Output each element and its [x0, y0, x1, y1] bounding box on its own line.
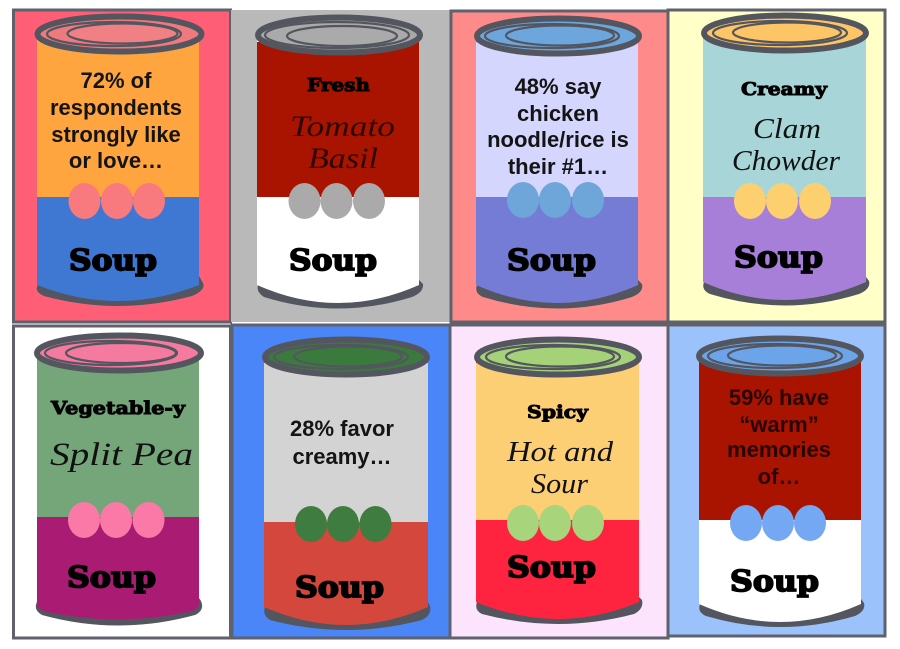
lid — [477, 18, 639, 54]
lid — [699, 338, 861, 374]
can text: noodle/rice is — [487, 127, 629, 152]
panel: Fresh Tomato Basil — [231, 10, 450, 322]
panel: 59% warm memories — [668, 325, 885, 636]
flavor name: Clam — [753, 114, 821, 145]
can: green and magenta — [36, 336, 202, 626]
soup label: Soup — [295, 570, 384, 604]
soup label: Soup — [289, 243, 377, 277]
can: red and white — [699, 338, 864, 627]
panel: 72% strongly like or love — [14, 10, 230, 322]
can text: Fresh — [307, 75, 370, 96]
can text: of… — [758, 464, 800, 489]
can: red and white — [257, 18, 423, 308]
lid — [258, 18, 420, 52]
can: orange and blue — [37, 16, 204, 306]
panel: Spicy Hot and Sour — [450, 325, 668, 638]
can text: 48% say — [515, 74, 602, 99]
can text: memories — [727, 437, 831, 462]
can text: respondents — [50, 95, 182, 120]
can text: creamy… — [292, 444, 392, 469]
panel: Creamy Clam Chowder — [668, 10, 885, 322]
dots — [288, 183, 385, 219]
soup label: Soup — [730, 564, 819, 598]
lid — [704, 16, 866, 50]
can text: chicken — [517, 101, 599, 126]
soup label: Soup — [69, 243, 157, 277]
can text: Spicy — [527, 402, 589, 423]
flavor name: Split Pea — [50, 437, 193, 473]
dots — [507, 505, 604, 541]
dots — [730, 505, 826, 541]
flavor name: Chowder — [732, 146, 840, 177]
dots — [68, 183, 165, 219]
panel: Vegetable-y Split Pea — [14, 326, 230, 638]
dots — [734, 183, 831, 219]
can: teal and purple — [703, 16, 869, 306]
flavor name: Hot and — [506, 436, 614, 468]
can: grey and red — [264, 340, 430, 630]
lid — [38, 16, 202, 52]
can text: strongly like — [51, 122, 181, 147]
can text: their #1… — [508, 154, 608, 179]
can text: 28% favor — [290, 416, 394, 441]
dots — [295, 506, 392, 542]
panel: 28% favor creamy — [232, 325, 450, 638]
lid — [265, 340, 427, 374]
can text: 72% of — [81, 68, 152, 93]
can text: “warm” — [739, 412, 819, 437]
can text: Creamy — [741, 79, 828, 100]
lid — [477, 340, 639, 374]
soup label: Soup — [734, 240, 823, 274]
flavor name: Sour — [531, 468, 589, 500]
panel: 48% chicken noodle — [451, 11, 668, 322]
soup label: Soup — [67, 560, 156, 594]
can: yellow and red — [476, 340, 642, 624]
can: lavender and periwinkle — [476, 18, 642, 308]
dots — [507, 182, 604, 218]
lid — [37, 336, 201, 370]
can text: 59% have — [729, 385, 829, 410]
soup label: Soup — [507, 550, 596, 584]
dots — [68, 502, 164, 538]
flavor name: Basil — [308, 142, 378, 175]
can text: Vegetable-y — [50, 398, 186, 419]
can text: or love… — [69, 148, 163, 173]
flavor name: Tomato — [290, 110, 395, 143]
soup label: Soup — [507, 243, 596, 277]
